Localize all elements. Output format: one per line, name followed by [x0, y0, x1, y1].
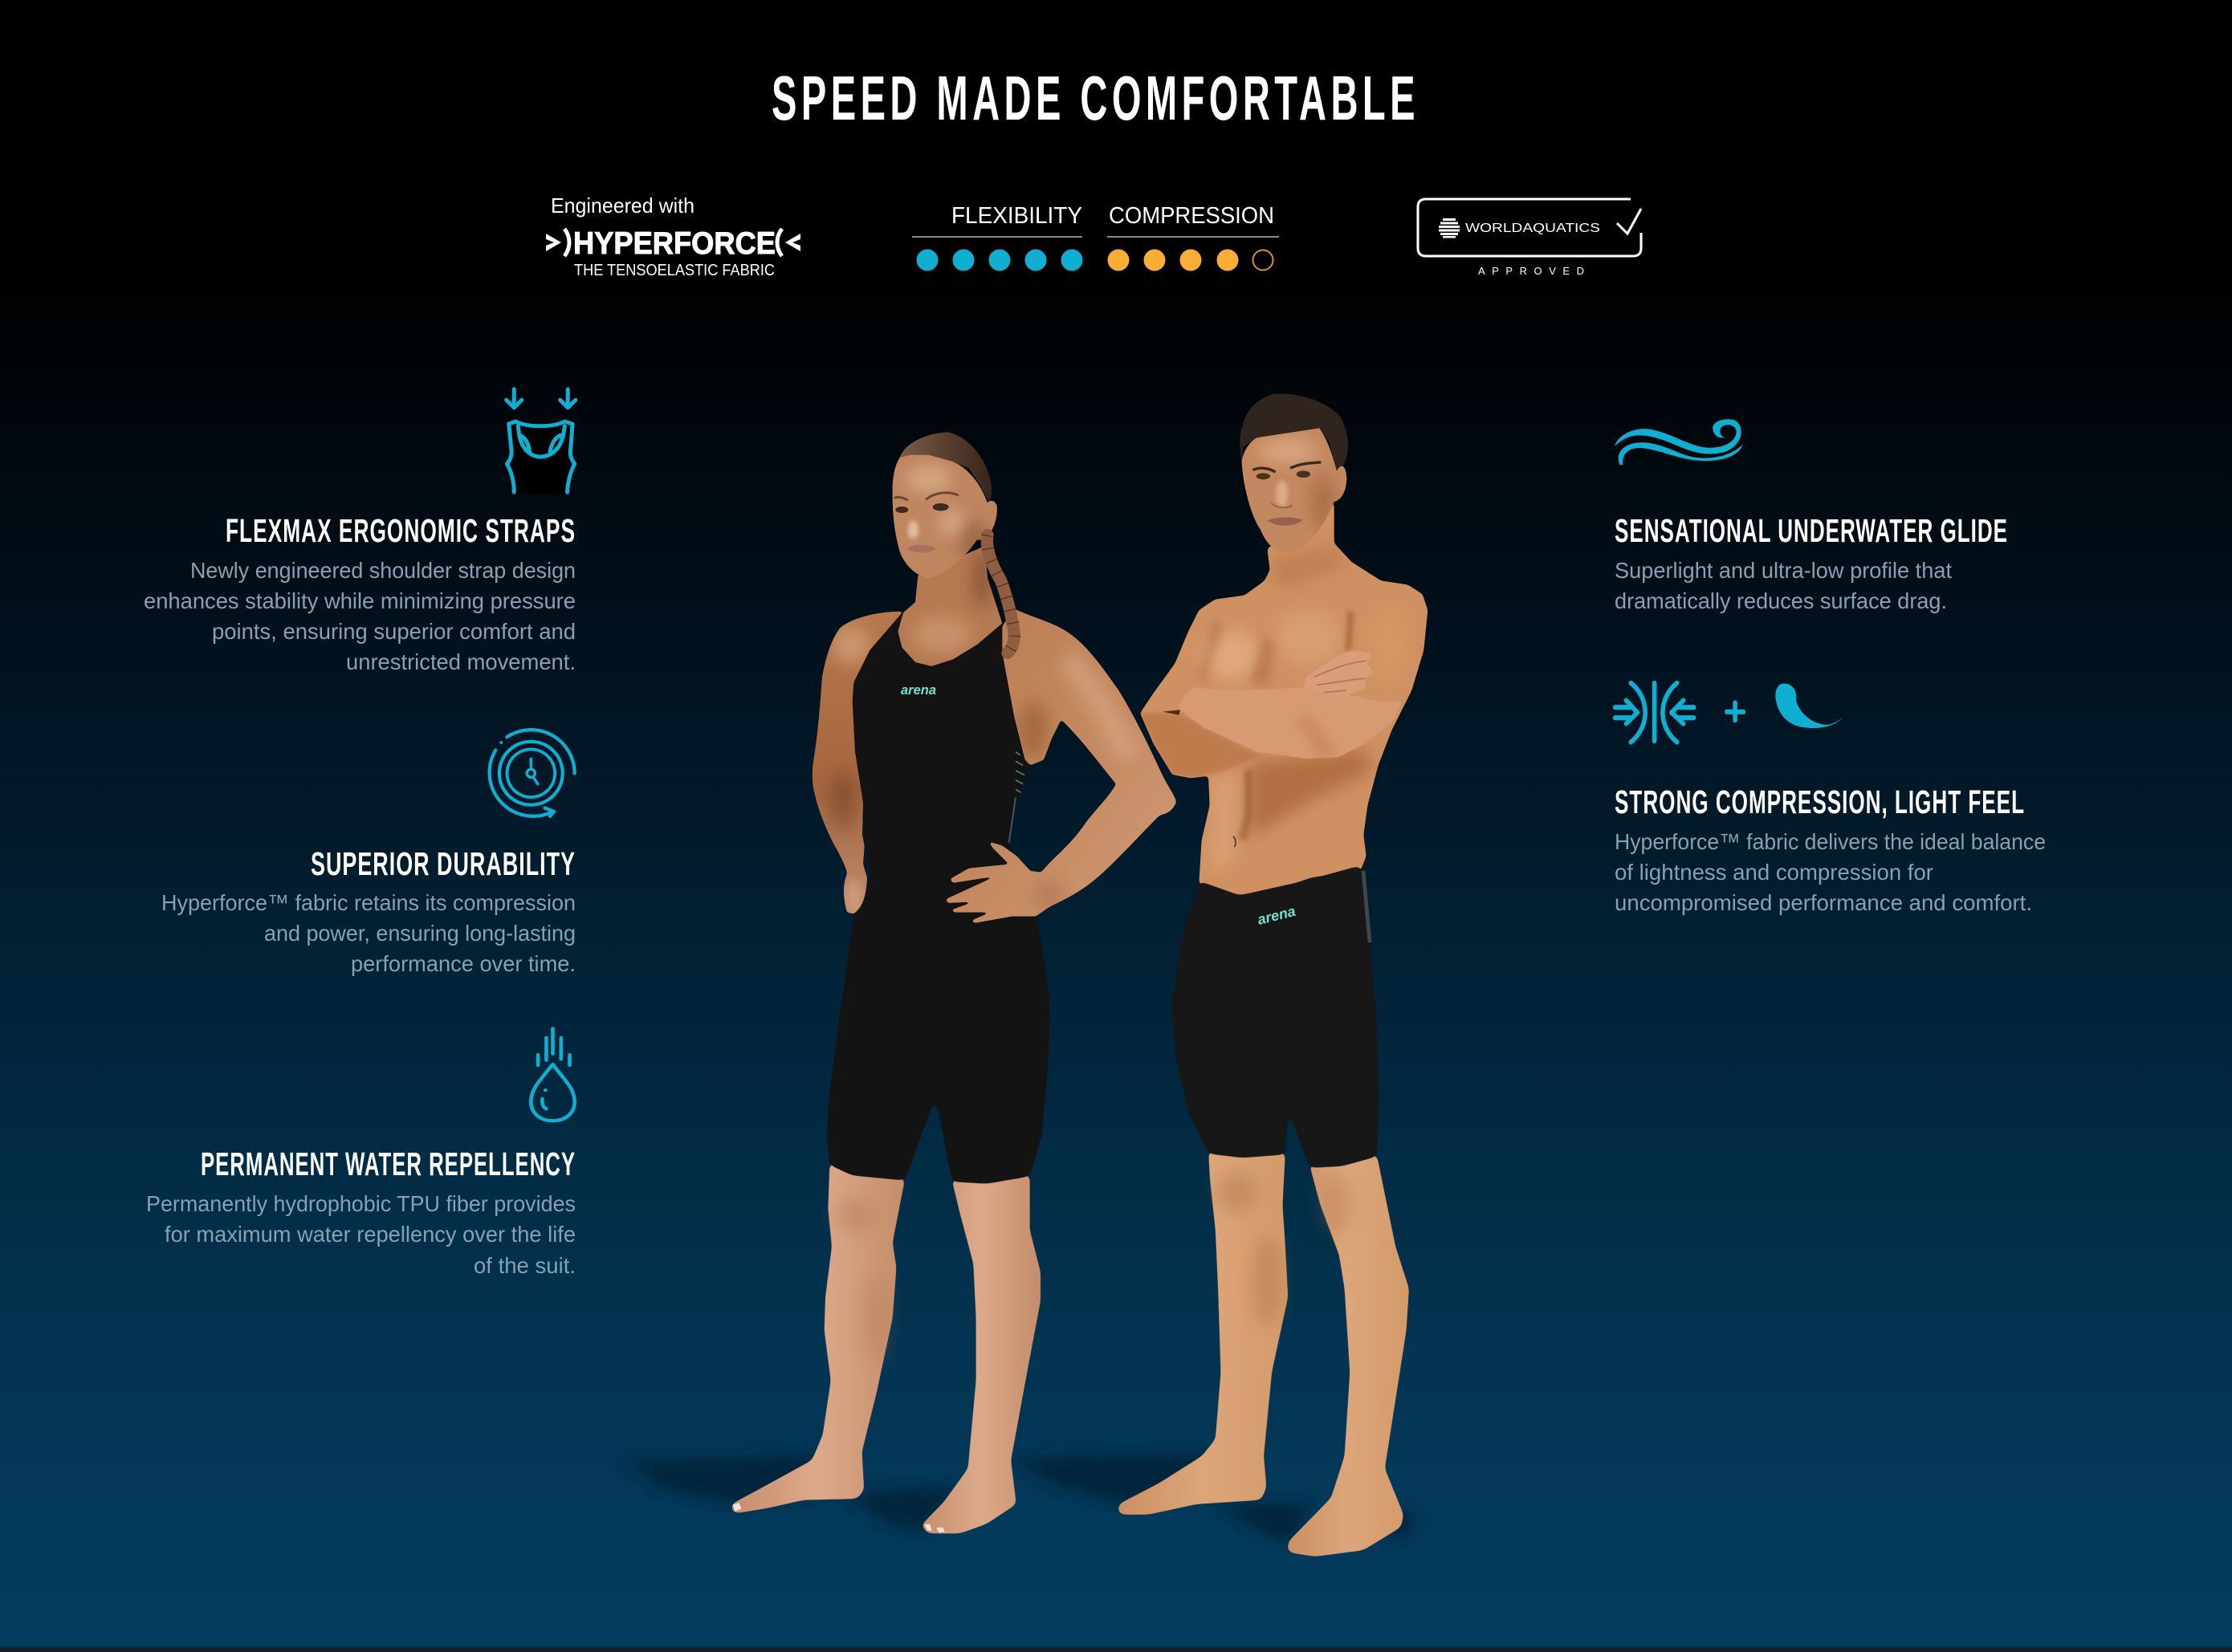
- heading: PERMANENT WATER REPELLENCY: [201, 1145, 576, 1182]
- rating: compression: [1107, 203, 1279, 271]
- badge: World Aquatics approved: WORLDAQUATICS: [1465, 222, 1600, 235]
- heading: SENSATIONAL UNDERWATER GLIDE: [1615, 512, 2008, 549]
- woman neck and chest: [898, 547, 1002, 666]
- icon: wave: [1615, 419, 1743, 465]
- logo: Engineered with Hyperforce: THE TENSOELASTIC FABRIC: [574, 262, 775, 279]
- man jammer logo: arena: [1256, 903, 1297, 928]
- body text: [144, 558, 576, 674]
- panel: Sensational underwater glide: [1615, 419, 2008, 613]
- woman left arm: [813, 612, 903, 913]
- rating: flexibility: [912, 203, 1082, 271]
- man crossed forearm: [1179, 688, 1403, 759]
- man black jammer: [1171, 865, 1375, 1016]
- body text: Newly engineered shoulder strap design: [190, 558, 576, 583]
- body text: [1615, 829, 2046, 915]
- body text: of the suit.: [474, 1253, 576, 1278]
- logo: Engineered with Hyperforce: HYPERFORCE: [573, 226, 776, 261]
- body text: enhances stability while minimizing pressure: [144, 588, 576, 613]
- infographic canvas: [145, 75, 2045, 1556]
- figure: man in jammer: [1118, 393, 1428, 1556]
- body text: Hyperforce™ fabric delivers the ideal balance: [1615, 829, 2046, 854]
- heading: SUPERIOR DURABILITY: [311, 845, 576, 882]
- heading: FLEXMAX ERGONOMIC STRAPS: [226, 512, 576, 549]
- man lower legs: [1118, 1151, 1409, 1556]
- icon: compression plus feather: [1615, 683, 1843, 743]
- logo: Engineered with Hyperforce: Engineered with: [551, 193, 694, 218]
- body text: for maximum water repellency over the life: [165, 1222, 576, 1247]
- icon: tank top with arrows: [507, 389, 576, 494]
- woman suit torso: [839, 608, 1050, 1022]
- woman suit legs: [827, 992, 1049, 1184]
- icon: water drop: [531, 1028, 575, 1121]
- man hand: [1303, 650, 1375, 696]
- body text: unrestricted movement.: [346, 649, 576, 674]
- woman lower legs: [731, 1163, 1041, 1533]
- body text: Permanently hydrophobic TPU fiber provides: [146, 1191, 576, 1216]
- woman right arm and hand: [946, 608, 1176, 923]
- man torso shading: [1140, 546, 1409, 873]
- body text: Superlight and ultra-low profile that: [1615, 558, 1952, 583]
- figure: woman in kneeskin: [731, 432, 1176, 1533]
- body text: performance over time.: [351, 951, 576, 976]
- panel: Permanent water repellency: [146, 1028, 576, 1278]
- body text: of lightness and compression for: [1615, 860, 1933, 885]
- woman hair: [900, 432, 992, 502]
- panel: Flexmax ergonomic straps: [144, 389, 576, 674]
- logo: Engineered with Hyperforce: [546, 193, 800, 279]
- icon: gauge with rotating arrow: [490, 730, 575, 816]
- man face: [1242, 428, 1346, 554]
- panel: Superior durability: [161, 730, 576, 976]
- body text: uncompromised performance and comfort.: [1615, 890, 2032, 915]
- floor shadows: [626, 1454, 1415, 1544]
- body text: [146, 1191, 576, 1278]
- badge: World Aquatics approved: APPROVED: [1478, 265, 1584, 277]
- woman chest, suit, arms and head: [813, 432, 1176, 1022]
- woman suit logo: arena: [901, 682, 936, 698]
- man hair: [1240, 393, 1348, 475]
- man torso, head and arms: [1140, 393, 1428, 897]
- man jammer legs: [1171, 992, 1379, 1168]
- body text: [161, 890, 576, 976]
- woman face: [893, 455, 997, 578]
- body text: dramatically reduces surface drag.: [1615, 588, 1947, 613]
- woman braid: [987, 535, 1014, 653]
- panel: Strong compression, light feel: [1615, 683, 2046, 915]
- rating: compression: COMPRESSION: [1109, 203, 1274, 229]
- body text: [1615, 558, 1952, 613]
- rating: flexibility: FLEXIBILITY: [951, 203, 1082, 229]
- body text: Hyperforce™ fabric retains its compression: [161, 890, 576, 915]
- body text: and power, ensuring long-lasting: [264, 921, 576, 946]
- title: SPEED MADE COMFORTABLE: [772, 63, 1419, 133]
- badge: World Aquatics approved: [1418, 199, 1641, 277]
- body text: points, ensuring superior comfort and: [212, 619, 576, 644]
